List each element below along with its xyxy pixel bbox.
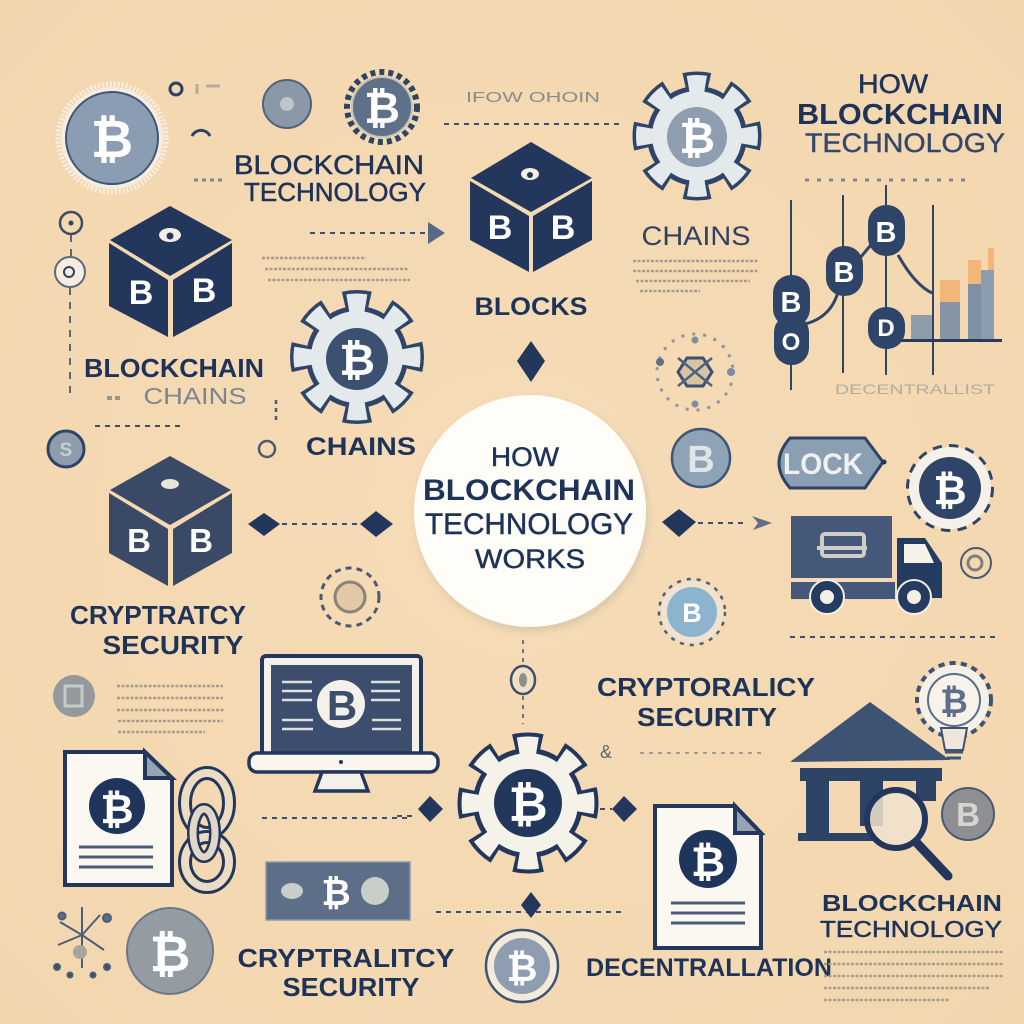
chart: chain nodes and bars: B <box>834 257 854 289</box>
icon: bill: ₿ <box>321 873 351 914</box>
heading: cryptocurrency security left <box>70 600 246 660</box>
icon: document centre <box>655 806 761 948</box>
icon: chain links <box>185 773 229 887</box>
chart: chain nodes and bars: O <box>782 329 800 356</box>
heading: cryptocurrency security left: SECURITY <box>102 630 244 660</box>
icon: node below circle <box>511 640 535 724</box>
central circle: TECHNOLOGY <box>425 508 633 541</box>
icon: coin beside circle <box>672 429 730 487</box>
icon: dotted line lower <box>262 817 410 819</box>
icon: large gear: ₿ <box>339 335 375 386</box>
arrow: diamond to truck <box>662 509 772 537</box>
icon: coin right of bank: B <box>956 796 980 833</box>
label: decentrality faded: DECENTRALLIST <box>835 381 996 397</box>
icon: bottle cap coin <box>347 72 417 142</box>
icon: small link <box>259 400 276 457</box>
heading: cryptocurrency security right <box>597 672 815 732</box>
heading: cryptocurrency security left: CRYPTRATCY <box>70 600 246 630</box>
icon: gear top centre: ₿ <box>679 113 715 164</box>
central circle <box>414 395 648 631</box>
icon: bill <box>266 862 410 920</box>
central circle: HOW <box>491 442 560 472</box>
heading: cryptocurrency security right: CRYPTORALICY <box>597 672 815 702</box>
heading: how blockchain technology top right: TECHNOLOGY <box>805 128 1005 158</box>
icon: vertical timeline left <box>55 212 85 395</box>
arrow: dashed arrow to blocks <box>310 222 445 244</box>
heading: chains: CHAINS <box>306 433 416 461</box>
icon: flat grey coin <box>263 80 311 128</box>
heading: cryptocurrency security bottom: CRYPTRALITCY <box>238 943 454 973</box>
icon: cube lower left: B <box>189 522 213 559</box>
icon: truck <box>791 516 942 614</box>
text block: faded copy <box>262 258 410 280</box>
chart: chain nodes and bars <box>773 180 1002 390</box>
heading: blockchain technology: BLOCKCHAIN <box>234 150 424 180</box>
chart: chain nodes and bars: D <box>877 315 895 342</box>
icon: cube lower left: B <box>127 522 151 559</box>
icon: coin right of bank <box>942 788 994 840</box>
arrow: two-diamond dashed link <box>248 511 393 537</box>
arrow: dashed line top <box>444 123 620 125</box>
text block: chains copy <box>633 261 758 291</box>
heading: blockchain technology <box>234 150 426 207</box>
heading: blockchain chains: CHAINS <box>144 383 246 409</box>
heading: chains right: CHAINS <box>642 221 750 251</box>
arrow: dashed to diamond bottom <box>436 892 622 918</box>
icon: cube centre <box>470 142 592 272</box>
central circle: BLOCKCHAIN <box>423 474 635 507</box>
icon: cube left: B <box>129 274 153 312</box>
icon: lock tag <box>779 438 886 488</box>
icon: coin bottom centre <box>486 930 558 1002</box>
icon: light bulb <box>918 664 990 758</box>
icon: network star <box>54 907 111 978</box>
text block: bottom right copy <box>824 952 1004 1000</box>
chart: chain nodes and bars: B <box>781 287 801 319</box>
icon: cube left: B <box>192 272 216 310</box>
icon: monitor: B <box>327 682 357 729</box>
heading: how blockchain technology top right: HOW <box>858 69 929 99</box>
icon: bottle cap coin: ₿ <box>364 83 400 134</box>
icon: coin top left <box>58 84 166 192</box>
icon: cube lower left <box>109 456 232 586</box>
icon: cube centre: B <box>551 209 575 247</box>
heading: cryptocurrency security bottom: SECURITY <box>282 972 420 1002</box>
icon: monitor <box>249 656 438 791</box>
text block: lower left copy <box>117 686 224 732</box>
icon: dashed blue coin: B <box>682 598 702 628</box>
icon: grey coin bottom <box>127 908 213 994</box>
label: how chain: IFOW OHOIN <box>466 89 600 106</box>
icon: coin e <box>53 675 95 717</box>
decorative dashed lines right <box>790 636 995 638</box>
heading: blockchain chains <box>84 353 264 409</box>
icon: bottom gear: ₿ <box>508 777 548 833</box>
heading: cryptocurrency security right: SECURITY <box>637 702 777 732</box>
icon: dashed ring <box>321 568 379 626</box>
icon: cube centre: B <box>488 209 512 247</box>
icon: bank with magnifier <box>790 702 950 876</box>
icon: bottom gear <box>470 745 586 861</box>
icon: document left <box>65 752 172 885</box>
icon: scalloped coin right <box>909 447 991 529</box>
heading: blockchain technology bottom right <box>820 890 1002 942</box>
arrow: diamonds around bottom gear <box>392 796 637 822</box>
central circle: WORKS <box>475 544 585 574</box>
icon: gear top centre <box>644 83 750 189</box>
icon: small ring right <box>961 548 991 578</box>
icon: cube left <box>109 206 232 337</box>
heading: blockchain technology bottom right: TECHNOLOGY <box>820 916 1002 942</box>
icon: document centre: ₿ <box>691 837 725 886</box>
heading: blocks: BLOCKS <box>474 293 588 321</box>
heading: cryptocurrency security bottom <box>238 943 454 1002</box>
heading: blockchain technology: TECHNOLOGY <box>244 177 426 207</box>
heading: how blockchain technology top right <box>797 69 1005 158</box>
heading: how blockchain technology top right: BLOCKCHAIN <box>797 99 1003 131</box>
icon: coin top left: ₿ <box>91 110 133 170</box>
heading: blockchain chains: BLOCKCHAIN <box>84 353 264 383</box>
icon: dashed blue coin <box>659 579 725 645</box>
icon: lock tag: LOCK <box>783 448 863 481</box>
icon: small marks <box>170 83 222 180</box>
icon: coin beside circle: B <box>687 439 715 481</box>
icon: small coin left <box>48 431 84 467</box>
chart: chain nodes and bars: B <box>876 217 896 249</box>
icon: small coin left: S <box>60 440 72 461</box>
icon: diamond <box>517 341 545 382</box>
heading: decentralization: DECENTRALLATION <box>586 954 832 982</box>
icon: network <box>656 334 735 410</box>
icon: scalloped coin right: ₿ <box>933 466 967 514</box>
icon: coin bottom centre: ₿ <box>507 946 537 990</box>
arrow: dashed left line <box>95 425 180 427</box>
icon: grey coin bottom: ₿ <box>150 925 190 983</box>
text block: ampersand line: & <box>600 742 612 762</box>
icon: large gear <box>302 302 412 412</box>
heading: blockchain technology bottom right: BLOCKCHAIN <box>822 890 1002 916</box>
icon: document left: ₿ <box>100 785 134 833</box>
icon: light bulb: ₿ <box>940 683 968 721</box>
